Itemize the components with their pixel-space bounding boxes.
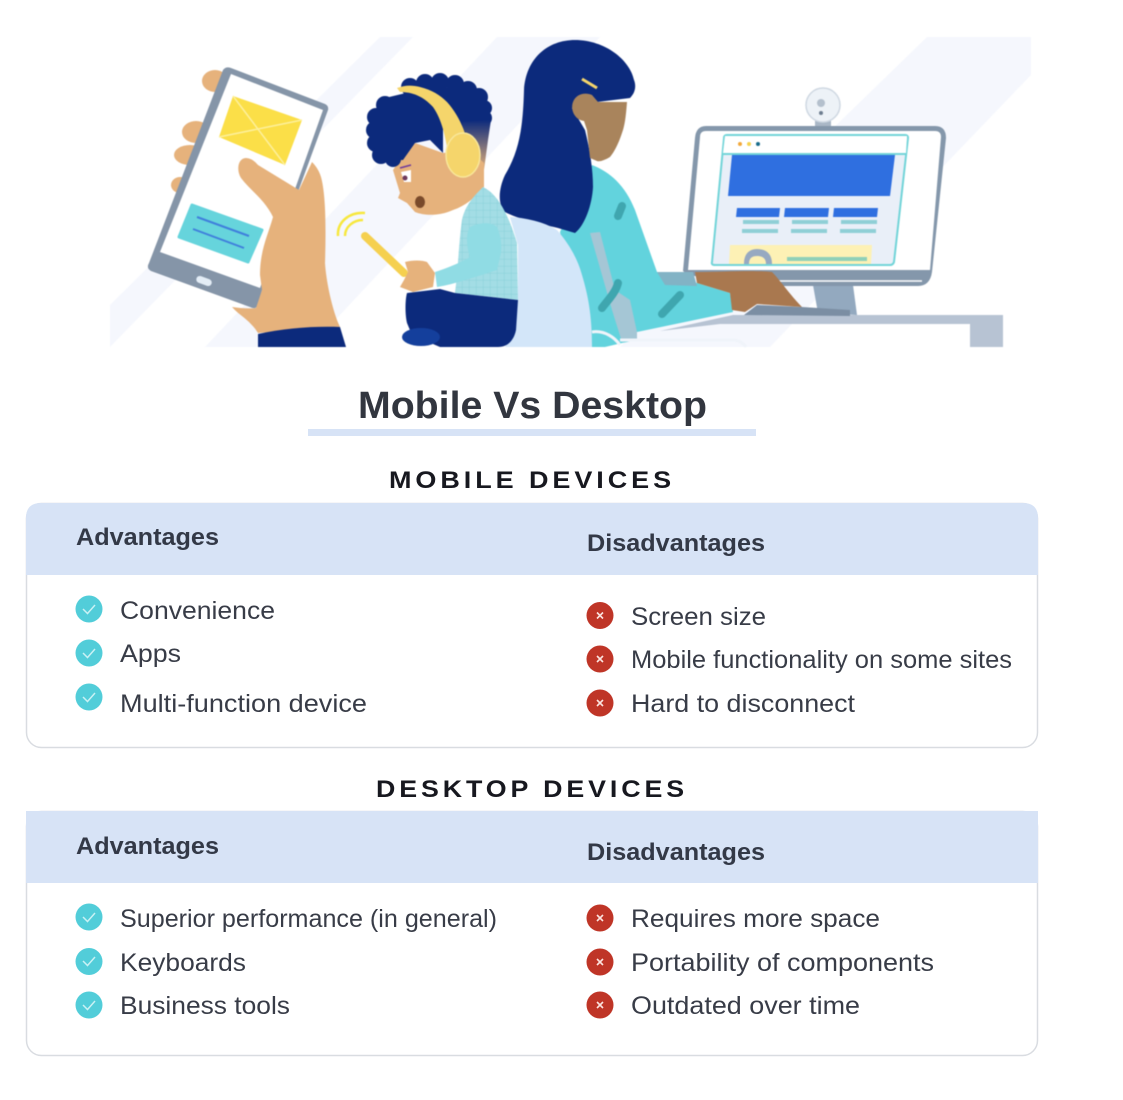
disadvantage: screen size: Screen size — [631, 603, 766, 631]
advantage: apps — [76, 640, 181, 668]
advantage: convenience: Convenience — [120, 597, 275, 625]
hair clip — [582, 79, 597, 88]
hand — [400, 260, 435, 292]
icon: hand fingers behind phone — [171, 70, 228, 193]
figure: woman at desktop — [500, 40, 802, 347]
desk — [660, 315, 1003, 347]
mouth — [415, 196, 425, 208]
column heading: advantages: Advantages — [76, 833, 219, 860]
advantage: superior performance: Superior performance (in general) — [120, 905, 497, 933]
front hair — [366, 92, 443, 167]
keyboard — [744, 305, 850, 316]
screen frame — [683, 126, 946, 286]
typing hand — [695, 271, 802, 312]
section heading: desktop devices: DESKTOP DEVICES — [376, 776, 688, 803]
stand — [813, 285, 857, 315]
icon: hand holding phone — [232, 158, 346, 347]
section heading: mobile devices: MOBILE DEVICES — [389, 467, 675, 494]
face and ear — [572, 94, 627, 161]
face — [393, 143, 484, 215]
background diagonal stripes — [110, 37, 1031, 347]
headphone cup — [446, 133, 480, 177]
panel card — [26, 812, 1038, 1056]
arm — [435, 223, 501, 287]
shirt shading — [590, 232, 637, 342]
panel: mobile devices — [26, 503, 1038, 748]
column heading: disadvantages: Disadvantages — [587, 839, 765, 866]
advantage: apps: Apps — [120, 640, 181, 668]
back hair — [401, 73, 492, 140]
icon: message card — [179, 205, 262, 262]
hero banner — [728, 155, 895, 196]
panel header band — [26, 503, 1038, 575]
column heading: advantages: Advantages — [76, 524, 219, 551]
illustration: mobile and desktop users — [110, 37, 1031, 347]
sleeve cuff — [258, 327, 346, 347]
icon: envelope — [219, 96, 302, 165]
disadvantage: mobile functionality: Mobile functionality on some sites — [631, 646, 1012, 674]
advantage: multi-function device: Multi-function device — [120, 690, 367, 718]
panel card — [26, 504, 1038, 748]
disadvantage: hard to disconnect: Hard to disconnect — [631, 690, 855, 718]
shirt — [560, 165, 733, 347]
headphone band — [397, 86, 467, 147]
figure: boy with headphones — [365, 73, 518, 347]
eye — [401, 170, 411, 182]
webcam — [806, 88, 840, 128]
advantage: convenience — [76, 596, 275, 625]
advantage: keyboards: Keyboards — [120, 949, 246, 977]
panel: desktop devices — [26, 811, 1038, 1056]
title: Mobile Vs Desktop — [358, 385, 707, 427]
chair base — [592, 332, 746, 347]
vest — [455, 187, 518, 300]
panel header band — [26, 811, 1038, 883]
chair — [505, 217, 592, 347]
advantage: keyboards — [76, 948, 246, 977]
column heading: disadvantages: Disadvantages — [587, 530, 765, 557]
browser window — [712, 135, 908, 265]
disadvantage: requires more space: Requires more space — [631, 905, 880, 933]
shirt dashes — [602, 206, 680, 314]
trousers — [406, 289, 518, 347]
monitor — [683, 88, 946, 315]
cards — [736, 208, 878, 217]
icon: smartphone — [148, 67, 328, 308]
advantage: business tools: Business tools — [120, 992, 290, 1020]
icon: wifi signal arcs — [338, 213, 365, 236]
stylus — [365, 236, 404, 273]
hair — [500, 40, 635, 233]
title underline — [308, 429, 756, 436]
yellow panel — [729, 245, 872, 264]
disadvantage: portability of components: Portability of components — [631, 949, 934, 977]
advantage: multi-function device — [76, 684, 367, 718]
disadvantage: outdated over time: Outdated over time — [631, 992, 860, 1020]
